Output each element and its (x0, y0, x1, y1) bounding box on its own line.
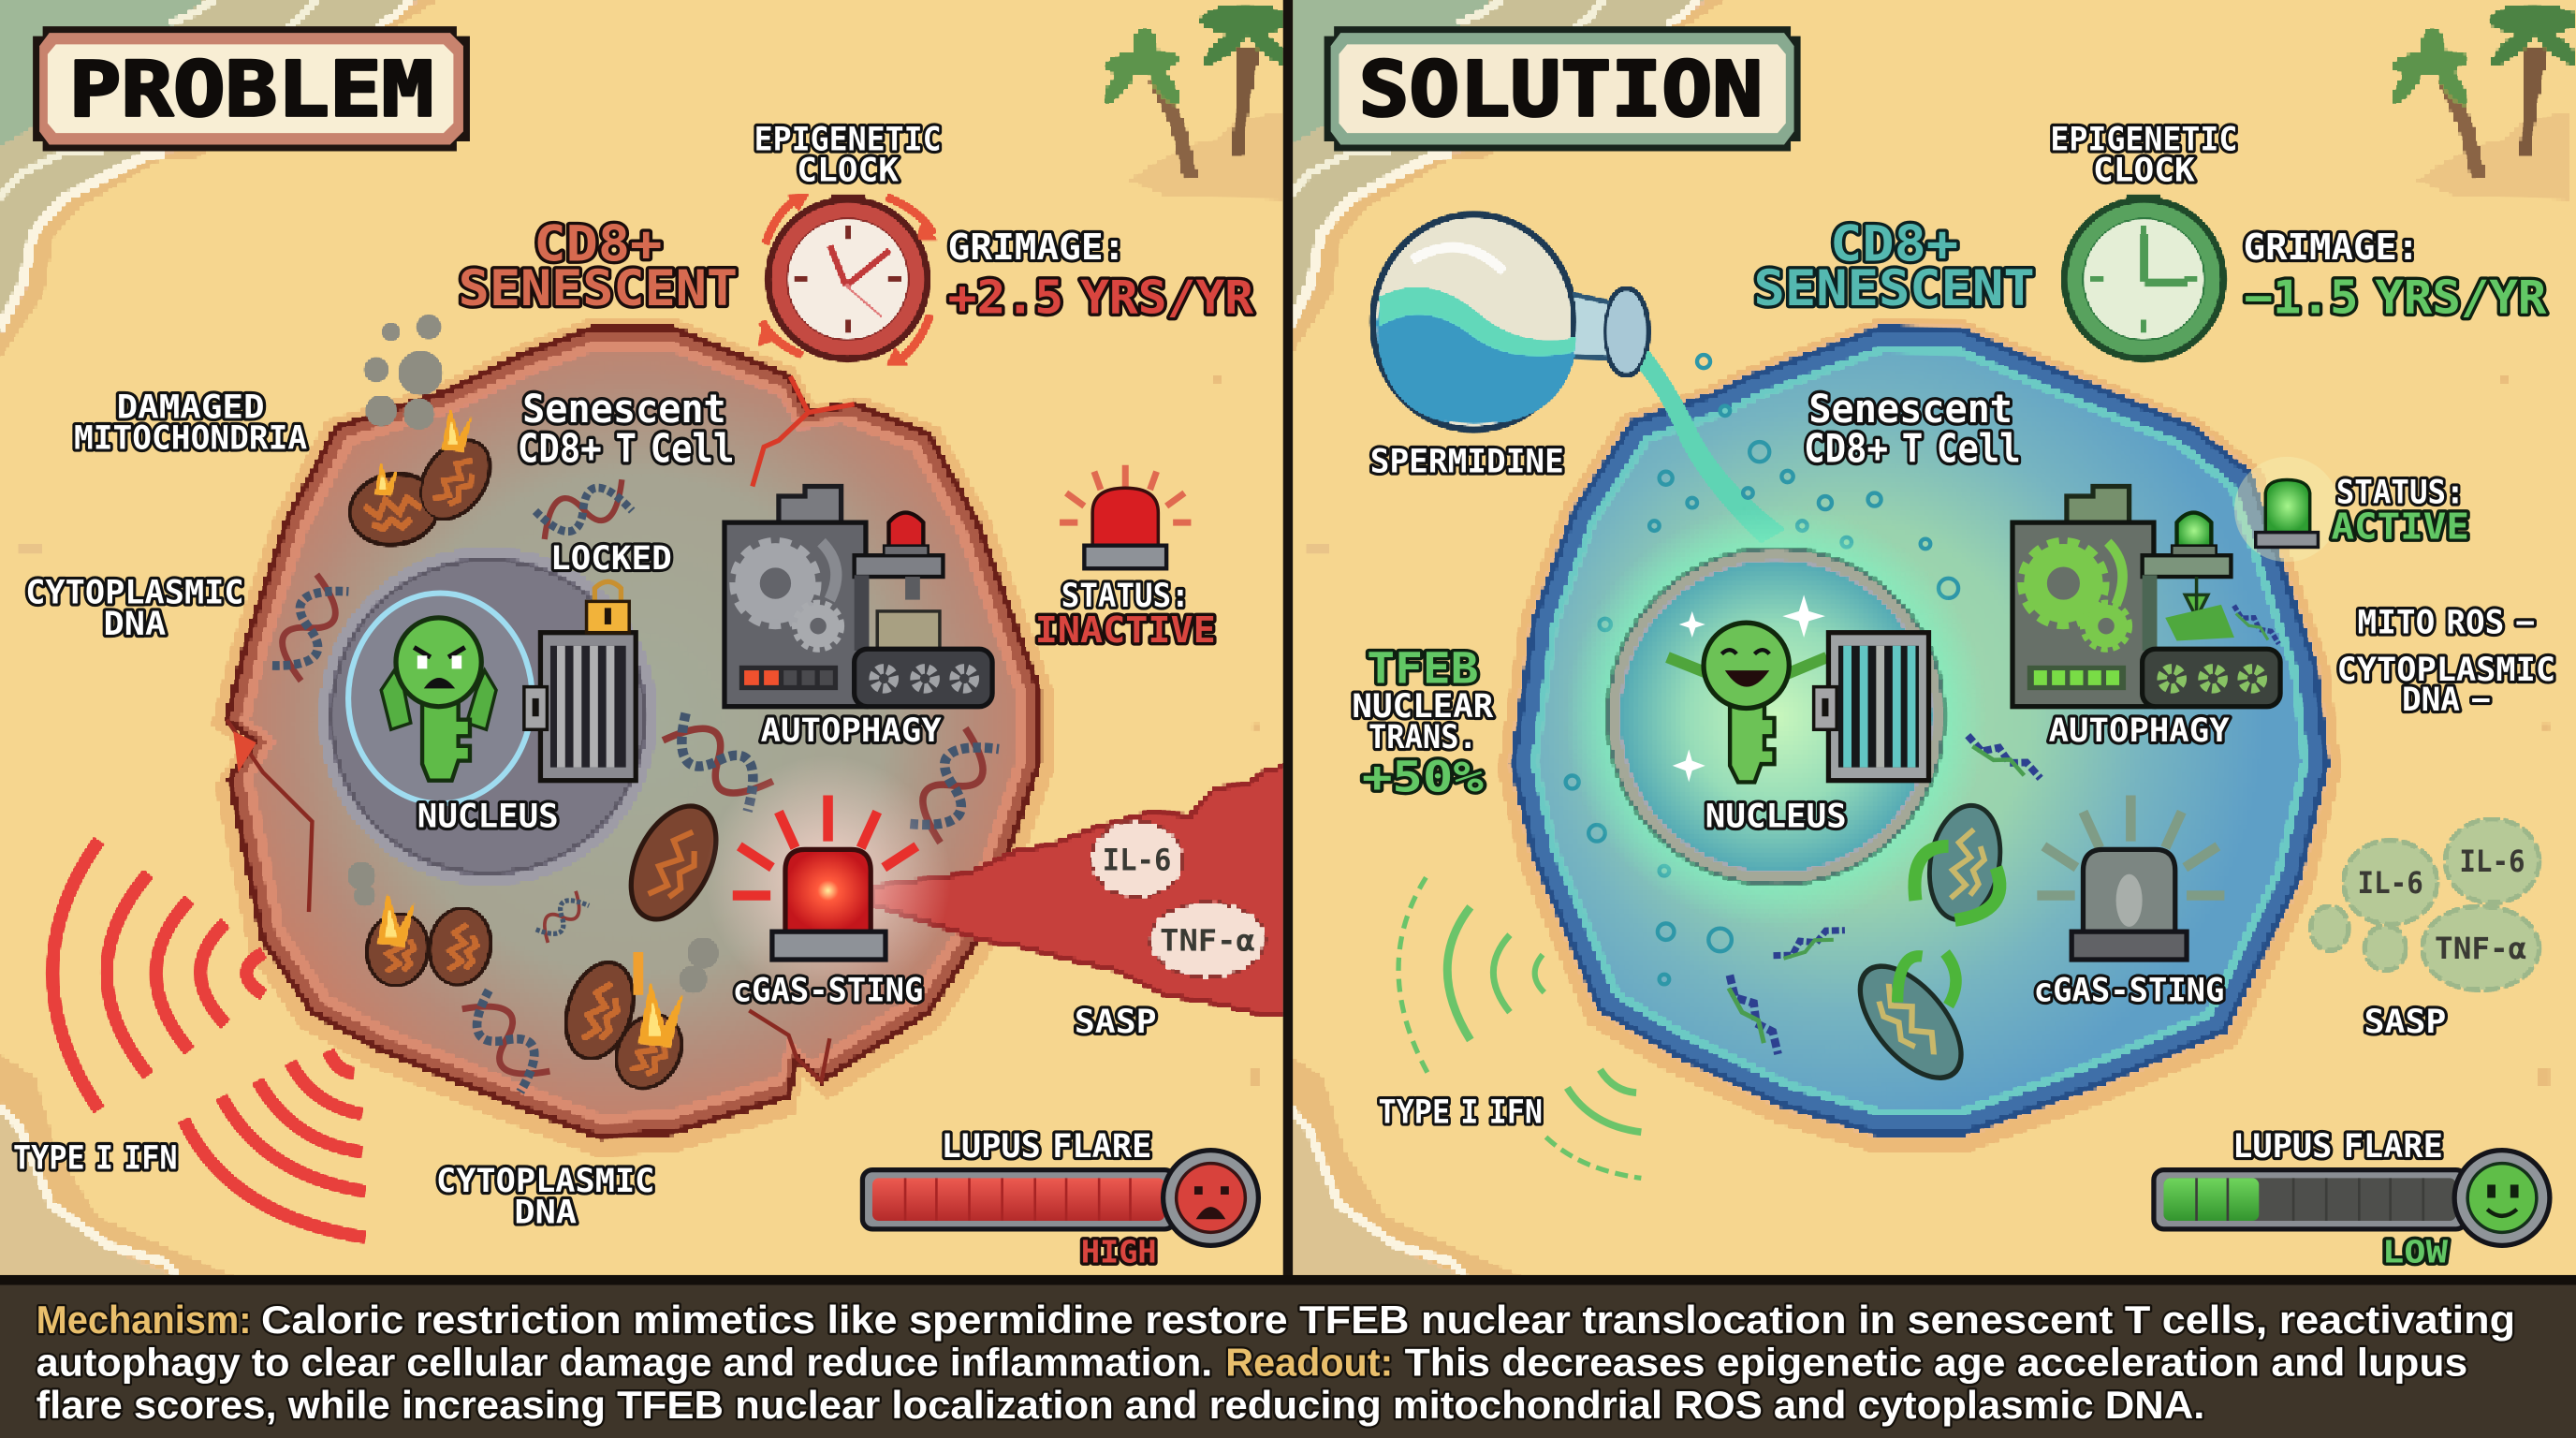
label: cell name (1804, 386, 2021, 471)
label: type I IFN: TYPE I IFN (13, 1138, 178, 1178)
icon: smiling face (2454, 1151, 2550, 1245)
label: cell name: Senescent (1808, 386, 2012, 432)
label: status inactive (1035, 577, 1216, 652)
label: mito ROS reduced: MITO ROS − (2358, 603, 2535, 641)
cell: senescent CD8+ T cell (212, 319, 1052, 1156)
title: PROBLEM: PROBLEM (69, 47, 433, 135)
icon: IL-6 label left: IL-6 (2358, 867, 2423, 901)
label: CD8+ senescent (459, 221, 739, 309)
label: GrimAge value (948, 227, 1254, 324)
caption bar (0, 1275, 2576, 1438)
chart: faded type I interferon waves (1398, 877, 1641, 1178)
icon: padlock (587, 581, 629, 633)
icon: intact mitochondrion (614, 792, 733, 933)
label: cytoplasmic DNA bottom: CYTOPLASMIC (436, 1162, 654, 1200)
label: epigenetic clock (754, 120, 942, 190)
label: lupus flare: LUPUS FLARE (942, 1127, 1151, 1166)
icon: silent cGAS-STING alarm (2037, 795, 2224, 960)
icon: barred gate (524, 633, 636, 781)
icon: distressed face (1164, 1151, 1258, 1245)
label: cell name (517, 389, 735, 466)
label: cytoplasmic DNA left (25, 574, 244, 643)
label: CD8+ senescent: CD8+ (534, 216, 662, 273)
label: status active: STATUS: (2336, 474, 2465, 512)
label: epigenetic clock: CLOCK (2093, 152, 2195, 190)
icon: status alarm (1060, 465, 1191, 568)
icon: SASP plume with cytokines (874, 764, 1298, 1016)
caption line 1: Mechanism: (37, 1298, 252, 1342)
label: epigenetic clock (2050, 120, 2237, 190)
label: cytoplasmic DNA reduced: DNA − (2402, 681, 2491, 719)
label: damaged mitochondria (74, 388, 307, 458)
caption line 1: Caloric restriction mimetics like spermidine restore TFEB nuclear translocation in senescent T cells, reactivating (261, 1298, 2515, 1342)
icon: spermidine flask pouring (1373, 215, 1784, 542)
label: CD8+ senescent: CD8+ (1830, 216, 1958, 273)
label: GrimAge value: GRIMAGE: (948, 227, 1125, 269)
icon: open gate (1814, 633, 1928, 781)
cell: restored CD8+ T cell (1499, 319, 2340, 1152)
label: nucleus: NUCLEUS (417, 797, 559, 835)
label: cytoplasmic DNA reduced: CYTOPLASMIC (2337, 651, 2555, 689)
label: TFEB nuclear translocation: +50% (1362, 752, 1484, 801)
label: cytoplasmic DNA bottom (436, 1162, 654, 1231)
divider (1283, 0, 1293, 1277)
icon: autophagy factory (inactive) (724, 487, 992, 707)
icon: IL-6 label right: IL-6 (2459, 845, 2525, 879)
icon: cGAS-STING alarm (705, 756, 951, 1003)
label: GrimAge value: +2.5 YRS/YR (948, 270, 1254, 324)
label: status active (2331, 474, 2469, 549)
label: TFEB nuclear translocation (1352, 643, 1494, 801)
label: low: LOW (2382, 1234, 2449, 1270)
caption line 2: Readout: (1225, 1340, 1393, 1384)
label: locked: LOCKED (550, 539, 672, 578)
label: TFEB nuclear translocation: NUCLEAR (1352, 687, 1494, 726)
icon: status light (2234, 457, 2339, 562)
label: epigenetic clock: CLOCK (797, 152, 899, 190)
label: TFEB nuclear translocation: TFEB (1367, 643, 1479, 693)
icon: ruptured mitochondrion with flame (555, 938, 718, 1099)
label: cytoplasmic DNA left: DNA (104, 605, 166, 643)
icon: autophagy factory (active) (2012, 487, 2286, 707)
panel: problem (0, 0, 1298, 1282)
icon: angry TFEB key (381, 618, 496, 781)
label: high: HIGH (1081, 1234, 1157, 1270)
caption line 3: flare scores, while increasing TFEB nuclear localization and reducing mitochondrial ROS and cytoplasmic DNA. (37, 1383, 2204, 1427)
label: CD8+ senescent: SENESCENT (459, 260, 738, 317)
label: CD8+ senescent (1754, 216, 2035, 317)
icon: accelerating clock (759, 194, 936, 365)
icon: sparkles (1673, 594, 1825, 782)
title: PROBLEM (33, 26, 470, 151)
label: type I IFN: TYPE I IFN (1379, 1093, 1543, 1131)
panel: solution (1288, 0, 2576, 1282)
nucleus with freed TFEB key (1566, 506, 1986, 927)
label: status inactive: INACTIVE (1035, 609, 1216, 652)
label: cell name: CD8+ T Cell (1804, 425, 2021, 471)
label: nucleus: NUCLEUS (1705, 797, 1847, 835)
label: cell name: Senescent (522, 386, 726, 432)
label: cytoplasmic DNA bottom: DNA (514, 1193, 577, 1231)
label: epigenetic clock: EPIGENETIC (754, 120, 942, 158)
label: cGAS-STING: cGAS-STING (2034, 971, 2224, 1009)
label: lupus flare: LUPUS FLARE (2232, 1127, 2443, 1166)
icon: healthy clock (2062, 196, 2226, 361)
icon: damaged mitochondrion with smoke (345, 315, 504, 550)
label: TFEB nuclear translocation: TRANS. (1368, 718, 1477, 756)
icon: blue containment field (348, 594, 533, 803)
icon: happy TFEB key (1667, 623, 1827, 782)
label: cGAS-STING: cGAS-STING (733, 971, 923, 1009)
caption line 2: This decreases epigenetic age acceleration and lupus (1405, 1340, 2467, 1384)
label: cytoplasmic DNA reduced (2337, 651, 2555, 719)
icon: ruptured mitochondrion (348, 862, 496, 990)
icon: TNF-alpha label: TNF-α (2435, 932, 2526, 966)
icon: IL-6 label: IL-6 (1103, 844, 1171, 877)
label: status active: ACTIVE (2331, 506, 2469, 549)
caption line 2 (37, 1340, 2467, 1384)
chart: lupus flare gauge low (2154, 1151, 2550, 1245)
icon: DNA fragments (269, 479, 1000, 1093)
label: epigenetic clock: EPIGENETIC (2050, 120, 2237, 158)
label: GrimAge value (2244, 227, 2547, 324)
label: spermidine: SPERMIDINE (1370, 442, 1564, 480)
title: SOLUTION (1325, 26, 1801, 151)
nucleus with trapped TFEB key (324, 552, 652, 881)
chart: type I interferon waves (52, 842, 365, 1238)
icon: mitochondrion recycling lower (1841, 948, 1980, 1095)
label: GrimAge value: −1.5 YRS/YR (2244, 270, 2547, 324)
chart: lupus flare gauge high (862, 1151, 1258, 1245)
caption line 2: autophagy to clear cellular damage and reduce inflammation. (37, 1340, 1212, 1384)
label: autophagy: AUTOPHAGY (2049, 712, 2230, 750)
label: GrimAge value: GRIMAGE: (2244, 227, 2419, 269)
background: beach with sea and palms (0, 0, 1298, 1282)
label: status inactive: STATUS: (1061, 577, 1190, 615)
icon: spermidine droplets (1566, 355, 1958, 984)
label: autophagy: AUTOPHAGY (761, 712, 942, 750)
label: damaged mitochondria: DAMAGED (117, 388, 265, 426)
label: damaged mitochondria: MITOCHONDRIA (74, 419, 307, 458)
icon: TNF-alpha label: TNF-α (1160, 924, 1255, 958)
title: SOLUTION: SOLUTION (1358, 47, 1763, 135)
label: cell name: CD8+ T Cell (518, 425, 735, 471)
label: CD8+ senescent: SENESCENT (1754, 260, 2035, 317)
label: SASP: SASP (1075, 1003, 1157, 1041)
label: SASP: SASP (2364, 1003, 2446, 1041)
label: cytoplasmic DNA left: CYTOPLASMIC (25, 574, 244, 612)
icon: faded SASP cytokine clouds (2311, 820, 2539, 990)
icon: mitochondrion recycling upper (1914, 800, 2009, 926)
icon: cleared DNA fragments (1710, 736, 2045, 1054)
background: beach with sea and palms (1288, 0, 2576, 1282)
